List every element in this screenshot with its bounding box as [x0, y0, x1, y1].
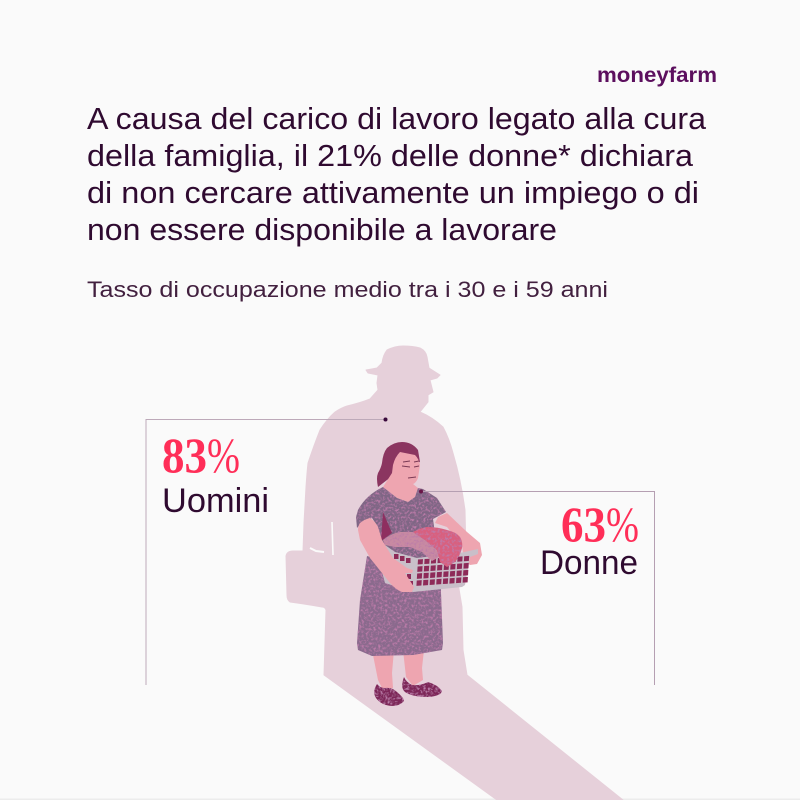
leader line: women — [419, 490, 654, 685]
stat: women 63%: % — [606, 496, 639, 552]
leader line: men — [146, 418, 388, 685]
stat: men 83%: % — [207, 427, 240, 483]
neck and face — [383, 452, 420, 502]
title: della famiglia, il 21% delle donne* dichiara — [87, 138, 694, 173]
laundry basket — [382, 545, 478, 592]
legs — [372, 650, 424, 690]
hair — [377, 442, 420, 487]
far arm — [435, 513, 482, 565]
title: di non cercare attivamente un impiego o di — [87, 175, 699, 210]
title: non essere disponibile a lavorare — [87, 212, 557, 247]
title: A causa del carico di lavoro legato alla cura — [87, 101, 707, 136]
shoes — [374, 677, 442, 706]
title — [87, 101, 707, 247]
logo: moneyfarm: moneyfarm — [597, 64, 717, 87]
stat: men 83% — [162, 427, 269, 520]
facial features — [402, 461, 419, 478]
stat: men 83%: 83 — [162, 427, 207, 483]
stat: women 63%: 63 — [561, 496, 606, 552]
woman figure — [356, 442, 482, 706]
dress top — [356, 487, 446, 562]
stat: men 83%: Uomini — [162, 482, 269, 520]
man silhouette with long shadow — [286, 346, 623, 800]
stat: women 63% — [540, 496, 639, 582]
subtitle: Tasso di occupazione medio tra i 30 e i 59 anni — [87, 277, 608, 302]
laundry pile — [383, 532, 439, 561]
skirt — [357, 556, 443, 656]
dress shadow — [381, 512, 392, 541]
near arm and hand — [358, 518, 414, 592]
stat: women 63%: Donne — [540, 544, 638, 582]
